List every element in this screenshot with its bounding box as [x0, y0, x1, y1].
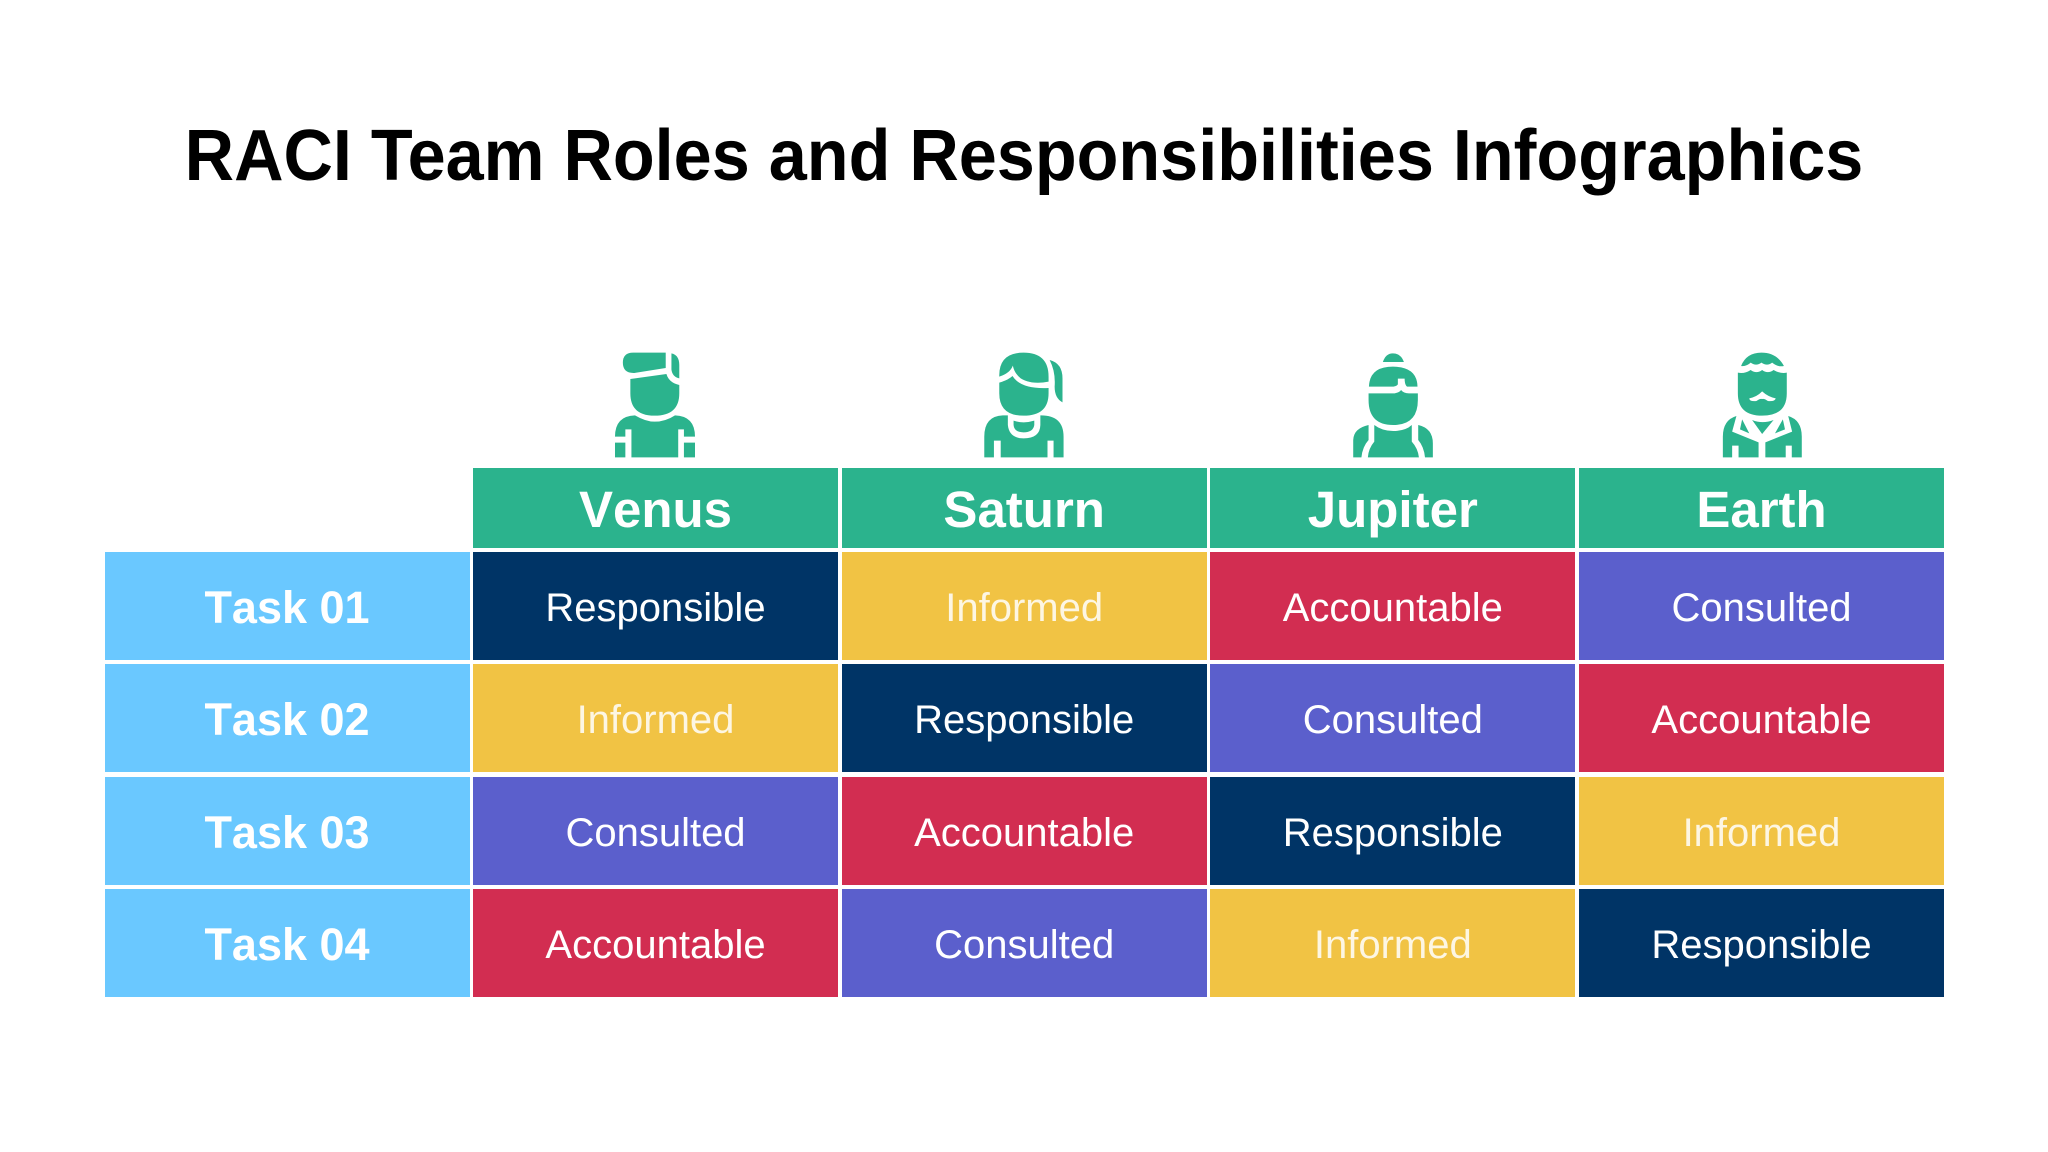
cell: Task 04 Saturn — [842, 889, 1207, 997]
column header: Venus — [473, 468, 838, 548]
cell: Task 04 Venus: Accountable — [545, 923, 766, 967]
cell: Task 01 Jupiter: Accountable — [1283, 586, 1503, 630]
title: RACI Team Roles and Responsibilities Infographics — [185, 116, 1863, 196]
icon: Saturn person — [984, 353, 1064, 457]
cell: Task 02 Earth: Accountable — [1651, 698, 1872, 742]
cell: Task 01 Venus — [473, 552, 838, 660]
cell: Task 01 Earth — [1579, 552, 1944, 660]
row label: Task 01 — [104, 552, 470, 660]
row label: Task 04: Task 04 — [204, 919, 370, 970]
cell: Task 02 Jupiter — [1210, 664, 1575, 772]
cell: Task 01 Saturn: Informed — [945, 586, 1103, 630]
cell: Task 02 Jupiter: Consulted — [1303, 698, 1483, 742]
column header: Saturn: Saturn — [943, 481, 1105, 538]
cell: Task 03 Saturn — [842, 777, 1207, 885]
row label: Task 02 — [104, 664, 470, 772]
cell: Task 04 Venus — [473, 889, 838, 997]
cell: Task 03 Earth: Informed — [1683, 811, 1840, 855]
cell: Task 04 Jupiter — [1210, 889, 1575, 997]
column header: Jupiter: Jupiter — [1308, 481, 1478, 538]
column header: Earth: Earth — [1696, 481, 1827, 538]
column header: Earth — [1579, 468, 1944, 548]
row label: Task 03 — [104, 777, 470, 885]
cell: Task 01 Venus: Responsible — [545, 586, 766, 630]
icon: Venus person — [615, 353, 695, 457]
column header: Jupiter — [1210, 468, 1575, 548]
cell: Task 03 Saturn: Accountable — [914, 811, 1134, 855]
cell: Task 04 Saturn: Consulted — [934, 923, 1114, 967]
cell: Task 03 Jupiter — [1210, 777, 1575, 885]
cell: Task 02 Saturn: Responsible — [914, 698, 1134, 742]
column header: Venus: Venus — [579, 481, 732, 538]
cell: Task 02 Venus — [473, 664, 838, 772]
icon: Jupiter person — [1353, 353, 1433, 457]
cell: Task 03 Venus — [473, 777, 838, 885]
cell: Task 02 Earth — [1579, 664, 1944, 772]
cell: Task 01 Earth: Consulted — [1671, 586, 1852, 630]
cell: Task 02 Venus: Informed — [577, 698, 734, 742]
column header: Saturn — [842, 468, 1207, 548]
cell: Task 02 Saturn — [842, 664, 1207, 772]
cell: Task 03 Earth — [1579, 777, 1944, 885]
cell: Task 04 Earth: Responsible — [1651, 923, 1872, 967]
row label: Task 03: Task 03 — [204, 807, 370, 858]
cell: Task 01 Jupiter — [1210, 552, 1575, 660]
cell: Task 04 Earth — [1579, 889, 1944, 997]
cell: Task 04 Jupiter: Informed — [1314, 923, 1472, 967]
cell: Task 03 Jupiter: Responsible — [1283, 811, 1503, 855]
row label: Task 02: Task 02 — [204, 694, 370, 745]
row label: Task 04 — [104, 889, 470, 997]
cell: Task 01 Saturn — [842, 552, 1207, 660]
icon: Earth person — [1723, 353, 1802, 457]
cell: Task 03 Venus: Consulted — [565, 811, 746, 855]
row label: Task 01: Task 01 — [204, 582, 370, 633]
